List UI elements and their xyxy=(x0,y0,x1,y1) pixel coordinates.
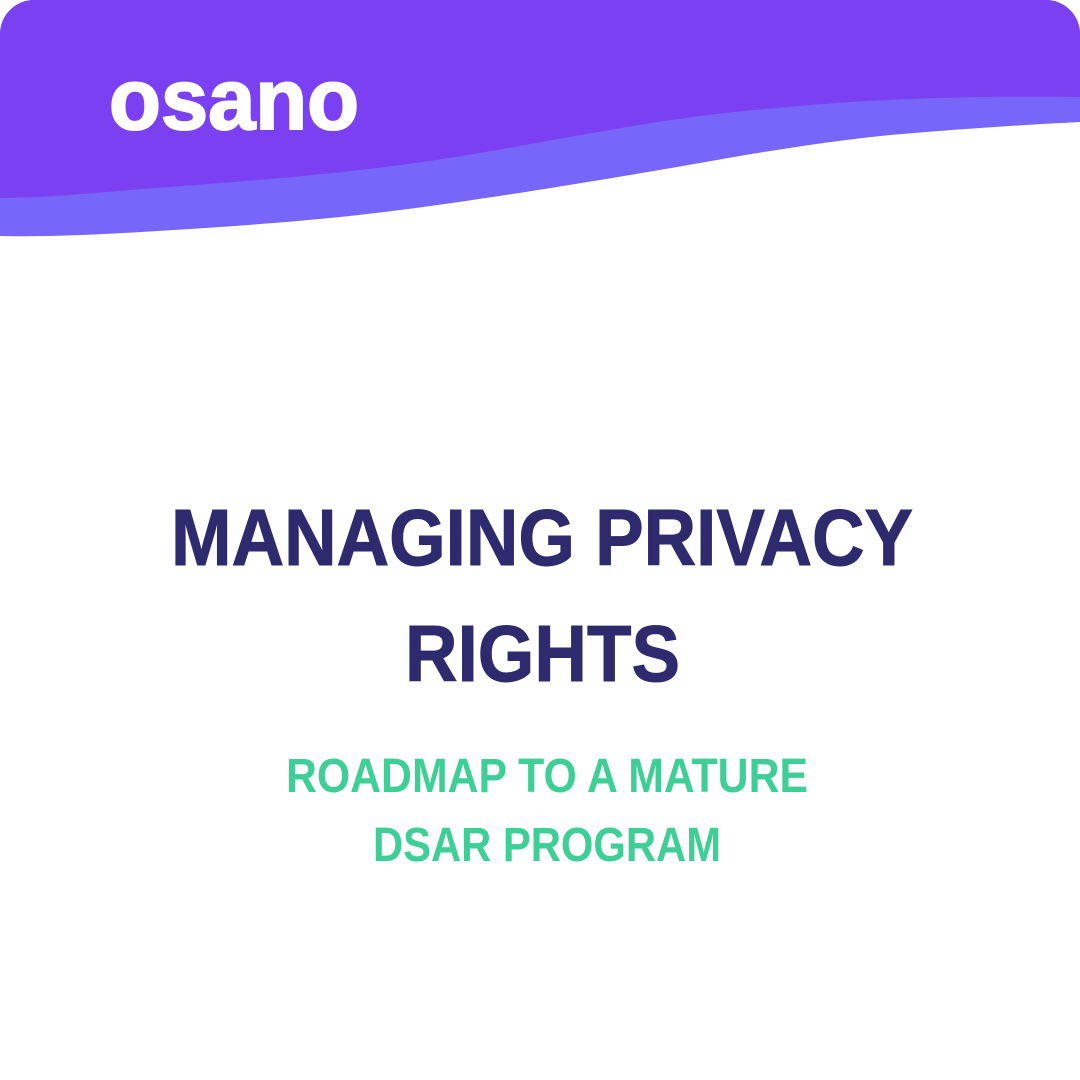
title xyxy=(171,493,913,698)
subtitle: DSAR PROGRAM xyxy=(373,819,721,872)
title: MANAGING PRIVACY xyxy=(171,493,913,582)
header wave banner xyxy=(0,0,1080,236)
dark purple band xyxy=(0,0,1080,198)
subtitle xyxy=(286,750,808,872)
subtitle: ROADMAP TO A MATURE xyxy=(286,750,808,803)
logo: osano: osano xyxy=(109,52,359,148)
light wave band xyxy=(0,0,1080,236)
title: RIGHTS xyxy=(405,609,680,698)
